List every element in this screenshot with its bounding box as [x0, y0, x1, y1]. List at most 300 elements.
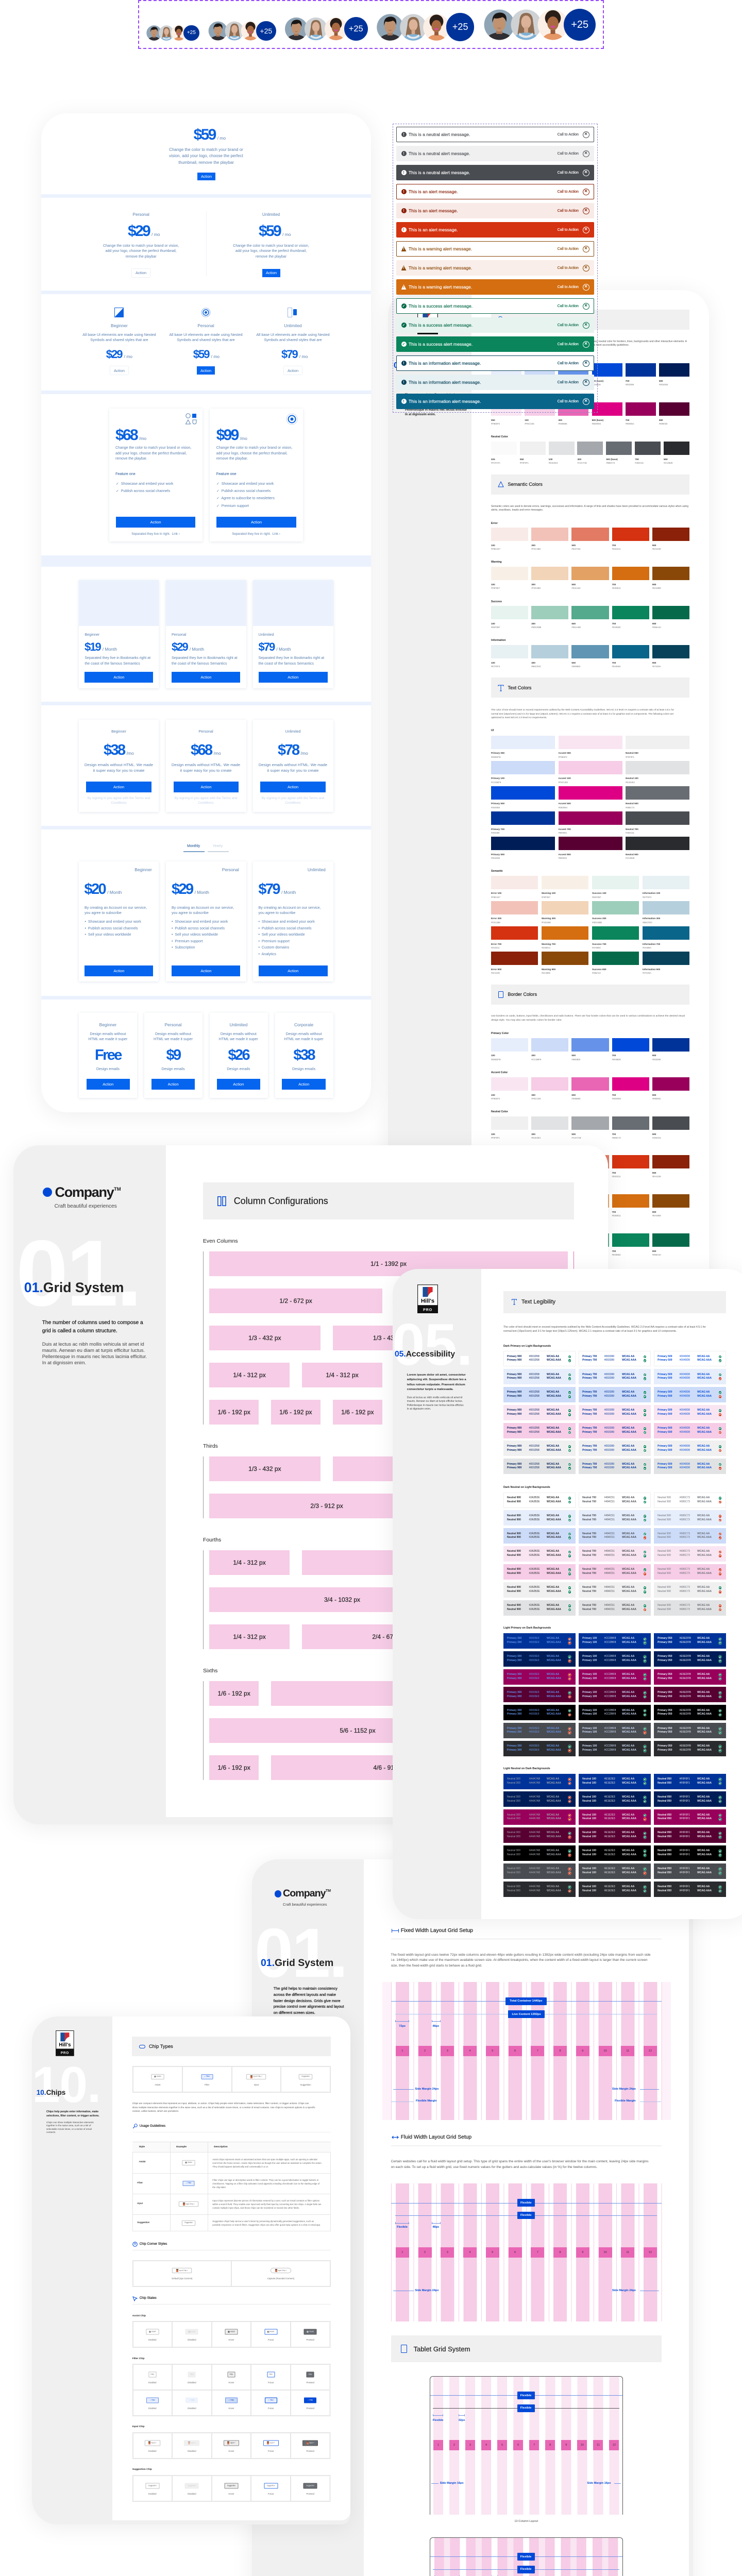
icon: chip pill [139, 2044, 145, 2048]
table: light neutral on dark: #F0F0F1 [680, 1795, 690, 1799]
swatches: warning border [491, 1194, 689, 1217]
text block: colours intro: Pellentesque in mauris nec lectus efficitur [405, 408, 467, 411]
swatches: neutral colour: #F0F0F1 [520, 462, 529, 464]
swatches: error: 100 [491, 544, 495, 546]
swatches: UI row 900: Accent 900 [559, 853, 571, 855]
table: dark primary on light: #001D58 [529, 1409, 539, 1412]
swatches: success border: 100 [491, 1250, 495, 1252]
table: light neutral on dark: Neutral 100 [582, 1795, 596, 1799]
table: dark neutral on light: Neutral 500 [657, 1586, 671, 1589]
list: personal: • Showcase and embed your work [172, 920, 228, 924]
alert: error outline: Call to Action [558, 190, 579, 194]
table: light neutral on dark: Neutral 300 [507, 1795, 520, 1799]
table: filter chip states: Hover [228, 2381, 234, 2384]
swatches: UI row 050: #E6EDFB [491, 756, 501, 758]
text block: column body: Duis at lectus ac nibh mollis vehicula sit amet id [42, 1341, 144, 1347]
button: beginner: Action [113, 675, 124, 680]
list: features right: ✓ Premium support [216, 504, 249, 508]
table: light neutral on dark: WCAG AA [622, 1814, 634, 1817]
column: fourths 3/4 [209, 1587, 475, 1612]
text block: assist: event from the home screen. Assist chips function as though the user asked an assistant to complete the action. [212, 2162, 322, 2164]
alert: warning outline: × [584, 245, 587, 251]
table: light primary on dark: #E6EDFB [680, 1655, 691, 1658]
swatches: UI row 900: Primary 900 [491, 853, 504, 855]
column numbers [433, 2440, 619, 2450]
table: light primary on dark: WCAG AA [622, 1691, 634, 1694]
price: feature plan left: $68 /mo [115, 427, 146, 444]
text block: terms personal [175, 796, 237, 805]
table: light neutral on dark: #A4A7AB [529, 1814, 540, 1817]
table: light neutral on dark: Neutral 300 [507, 1817, 520, 1820]
table: dark neutral on light: #686C73 [680, 1536, 690, 1539]
logo text: company: Company [283, 1888, 326, 1899]
text block: single plan description: vision, add your logo, choose the perfect [169, 154, 243, 158]
button: beginner: Action [113, 785, 124, 789]
table: dark neutral on light: #686C73 [680, 1518, 690, 1521]
table: light primary on dark: Primary 300 [507, 1641, 521, 1644]
swatches: success: #9DCEBB [531, 626, 541, 629]
table: light primary on dark: #CCDBF8 [604, 1713, 616, 1716]
text block: assist [212, 2158, 322, 2168]
table: light primary on dark: #CCDBF8 [604, 1695, 616, 1698]
text block: personal [154, 1031, 193, 1042]
chip: filter [182, 2181, 194, 2186]
table: light primary on dark [503, 1633, 726, 1756]
column numbers: 4 [469, 2251, 471, 2254]
text block: personal [169, 332, 243, 343]
table: dark primary on light: Primary 500 [657, 1431, 672, 1434]
heading: tablet grid system: Tablet Grid System [414, 2345, 470, 2352]
column numbers: 7 [533, 2444, 535, 2447]
label: semantic: Semantic [491, 870, 503, 873]
table: dark primary on light: #0049D8 [680, 1427, 690, 1430]
swatches: semantic 300: Information 300 [643, 917, 660, 920]
column: thirds filler [333, 1456, 446, 1481]
table: assist chip states: Assist [151, 2330, 156, 2332]
label: flexible content: Flexible [520, 2406, 531, 2410]
table: light neutral on dark: WCAG AA [547, 1867, 559, 1870]
table: light primary on dark: WCAG AA [547, 1691, 559, 1694]
swatches: primary colour: #6693E9 [558, 383, 567, 386]
text block: text colours intro [491, 708, 674, 719]
tagline: Craft beautiful experiences [283, 1902, 327, 1907]
swatches: primary border [491, 1038, 689, 1061]
swatches: UI row 500: #0049D8 [491, 806, 500, 809]
column numbers: 8 [559, 2251, 561, 2254]
alert: warning outline: This is a warning alert message. [409, 246, 472, 251]
label: column width: 72px [399, 2025, 406, 2028]
column: 1/6 third [333, 1400, 382, 1425]
avatar group: medium: +25 [349, 24, 363, 33]
heading: border colours: Border Colors [508, 992, 537, 997]
table: dark neutral on light: #494C51 [604, 1568, 615, 1571]
table: dark primary on light: WCAG AA [622, 1373, 634, 1376]
table: dark neutral on light: #686C73 [680, 1500, 690, 1503]
list: unlimited: • Showcase and embed your work [259, 920, 315, 924]
swatches: neutral border: #E1E2E3 [531, 1137, 541, 1139]
table: light primary on dark: #CCDBF8 [604, 1727, 616, 1730]
table: light primary on dark: WCAG AA [622, 1637, 634, 1640]
swatches: semantic 900: Success 900 [592, 968, 606, 971]
table: light primary on dark: #E6EDFB [680, 1641, 691, 1644]
table: light neutral on dark: WCAG AA [622, 1777, 634, 1781]
label: input chip: Input Chip [132, 2426, 144, 2428]
label: gutter: 32px [459, 2419, 465, 2422]
table: dark primary on light: #0049D8 [680, 1409, 690, 1412]
text block: grid intro: precise control over alignments and layout [274, 2004, 344, 2009]
swatches: error border: 100 [491, 1172, 495, 1174]
label: beginner: Beginner [111, 729, 126, 734]
table: light primary on dark: #E6EDFB [680, 1659, 691, 1662]
table: light primary on dark: Primary 300 [507, 1727, 521, 1730]
label: flexible content [517, 2566, 535, 2573]
table: light neutral on dark: Neutral 050 [657, 1831, 671, 1834]
alert: error outline: × [584, 189, 587, 194]
swatches: semantic 100: #E6F3EF [592, 896, 601, 899]
table: filter chip states: Enabled [148, 2381, 156, 2384]
table: dark primary on light: #0049D8 [680, 1359, 690, 1362]
table: light primary on dark: Primary 050 [657, 1677, 672, 1680]
table: light primary on dark: #6693E9 [529, 1655, 539, 1658]
table: suggestion chip states: Suggestion [188, 2484, 196, 2486]
table: dark neutral on light: Neutral 500 [657, 1500, 671, 1503]
swatches: warning: 300 [531, 583, 535, 585]
table: light neutral on dark: #A4A7AB [529, 1889, 540, 1892]
icon: Hill's logo: Hill's [59, 2043, 71, 2048]
table: chip types [132, 2066, 331, 2093]
column numbers: 11 [626, 2251, 629, 2254]
text block: column body [42, 1341, 147, 1366]
text block: corporate [284, 1031, 324, 1042]
table: dark primary on light: WCAG AA [547, 1391, 559, 1394]
text block: colours intro: The system palette. Personal design [405, 394, 459, 397]
swatches: accent colour: 500 (base) [592, 418, 603, 421]
table: dark neutral on light: #686C73 [680, 1604, 690, 1607]
swatches: warning border: 900 [652, 1211, 656, 1213]
swatches: UI row 100: #F6CCE6 [559, 781, 568, 784]
table: dark neutral on light: Neutral 700 [582, 1568, 596, 1571]
column: fourths 1/4 [209, 1550, 290, 1575]
text block: personal: it super easy for you to create [180, 768, 232, 773]
text block: terms beginner: Conditions [111, 801, 127, 805]
table: dark primary on light: #0049D8 [680, 1355, 690, 1358]
text block: terms beginner: By signing in you agree with the Terms and [88, 796, 150, 800]
text block: unlimited [259, 762, 327, 773]
table: dark neutral on light: Neutral 900 [507, 1532, 521, 1535]
alert: warning solid: This is a warning alert message. [409, 284, 472, 290]
swatches: information: 500 [571, 662, 576, 664]
alert: success tint: × [584, 321, 587, 328]
column: fourths 1/4 lower [209, 1624, 290, 1649]
table: dark primary on light: #003399 [604, 1413, 614, 1416]
text block: text colours intro: normal text (16px/1rem) and 3:1 for large text (18px/1.125rem). WCAG 2.1 requires a contrast ratio of at least 3:1 for graphics and UI components. The following colors are [491, 713, 674, 715]
swatches: UI row 500: Accent 500 [559, 802, 571, 805]
swatches: neutral border: #494C51 [652, 1137, 661, 1139]
text block: filter [212, 2178, 319, 2189]
table: dark neutral on light: Neutral 700 [582, 1518, 596, 1521]
table: light primary on dark: WCAG AAA [622, 1749, 636, 1752]
table: light primary on dark: Primary 050 [657, 1744, 672, 1748]
table: light neutral on dark: Neutral 100 [582, 1885, 596, 1888]
table: light neutral on dark: #A4A7AB [529, 1782, 540, 1785]
table: dark neutral on light: WCAG AAA [622, 1554, 636, 1557]
list: features right [216, 480, 275, 510]
price: personal: $29 / Month [172, 640, 204, 653]
text block: unlimited: Design emails without [221, 1031, 257, 1036]
table: input chip states: Input × [309, 2442, 314, 2444]
button: personal [174, 782, 239, 792]
swatches: UI row 050: #F0F0F1 [626, 756, 634, 758]
table: dark neutral on light: #494C51 [604, 1550, 615, 1553]
text block: beginner: you agree to subscribe [85, 911, 122, 915]
alert: neutral solid: This is a neutral alert message. [409, 170, 470, 175]
panel: grid layouts content [364, 1859, 689, 2576]
table: light neutral on dark: Neutral 300 [507, 1867, 520, 1870]
swatches: semantic 100: Error 100 [491, 892, 501, 894]
button: unlimited [260, 782, 326, 792]
text block: accessibility intro: adipiscing elit. Suspendisse dictum leo a [407, 1378, 466, 1381]
heading: text colours: Text Colors [508, 685, 531, 690]
table: dark neutral on light: #494C51 [604, 1514, 615, 1517]
icon: beginner square [114, 308, 124, 317]
table: light neutral on dark: WCAG AAA [697, 1800, 712, 1803]
swatches: semantic 700: Information 700 [643, 943, 660, 945]
label: flexible margin right: Flexible Margin [615, 2099, 636, 2103]
column numbers: 4 [469, 2049, 471, 2053]
table: light neutral on dark: #F0F0F1 [680, 1835, 690, 1838]
price: beginner: $29 / mo [106, 347, 132, 361]
card: feature plan right [210, 409, 303, 541]
swatches: error border: #F2C2B8 [531, 1175, 541, 1178]
table: input chip states: Input × [191, 2442, 196, 2444]
swatches: neutral colour: 050 [520, 457, 524, 461]
swatches: error: #E37A64 [571, 548, 581, 550]
swatches: success [491, 606, 689, 629]
table: light primary on dark: #CCDBF8 [604, 1749, 616, 1752]
button: feature plan right [216, 517, 296, 528]
table: light neutral on dark: #F0F0F1 [680, 1800, 690, 1803]
price: feature plan right: $99 /mo [216, 427, 247, 444]
section number: 01. [16, 1221, 140, 1326]
column: 1/4 second [302, 1363, 382, 1387]
table: light primary on dark: #E6EDFB [680, 1749, 691, 1752]
table: dark primary on light: WCAG AAA [547, 1359, 561, 1362]
heading bar: column configurations [203, 1182, 574, 1219]
table: light neutral on dark: #A4A7AB [529, 1853, 540, 1856]
table: dark primary on light: #001D58 [529, 1377, 539, 1380]
panel: chips page [32, 2016, 350, 2524]
table: dark neutral on light: Neutral 500 [657, 1532, 671, 1535]
icon: Hill's logo: PRO [423, 1307, 432, 1312]
table: light neutral on dark: #F0F0F1 [680, 1885, 690, 1888]
heading: semantic colours: Semantic Colors [508, 482, 543, 487]
column: sixths 5/6: 5/6 - 1152 px [340, 1727, 376, 1734]
table: dark primary on light: Primary 700 [582, 1413, 597, 1416]
swatches: UI row 900: #590033 [559, 857, 567, 859]
card: list plan unlimited [253, 861, 333, 981]
panel: accessibility page [393, 1269, 742, 1919]
alert: error outline [396, 184, 594, 199]
panel: avatar groups [138, 0, 604, 49]
label: flexible container: Flexible [520, 2201, 532, 2205]
button: unlimited [259, 672, 328, 683]
swatches: warning: 700 [612, 583, 616, 585]
text block: terms unlimited [262, 796, 324, 805]
column numbers: 1 [437, 2444, 439, 2447]
label: side margin right: Side Margin 24px [612, 2088, 636, 2091]
table: dark primary on light: #003399 [604, 1391, 614, 1394]
table: light neutral on dark: WCAG AA [622, 1795, 634, 1799]
table: light neutral on dark: #E1E2E3 [604, 1795, 615, 1799]
swatches: information: #E7F0F3 [491, 665, 500, 668]
alert: error outline: This is an alert message. [409, 189, 458, 194]
table: light neutral on dark: #F0F0F1 [680, 1867, 690, 1870]
swatches: primary border: #003399 [652, 1058, 661, 1061]
table: dark neutral on light: Neutral 900 [507, 1514, 521, 1517]
table: suggestion chip states: Focus [268, 2493, 274, 2495]
swatches: neutral border: 900 [652, 1132, 656, 1136]
table: dark neutral on light: WCAG AA [547, 1496, 559, 1499]
table: light neutral on dark: Neutral 100 [582, 1849, 596, 1852]
table: filter chip states: Hover [228, 2407, 234, 2410]
swatches: semantic 900: #8A2108 [491, 972, 500, 974]
table: light neutral on dark: #E1E2E3 [604, 1800, 615, 1803]
swatches: UI row 100: #E1E2E3 [626, 781, 635, 784]
text block: chips body: contacts. [46, 2131, 56, 2133]
column: thirds 2/3 [209, 1494, 444, 1518]
column: thirds 2/3: 2/3 - 912 px [310, 1502, 343, 1510]
swatches: error border: 300 [531, 1172, 535, 1174]
swatches: warning: #F8F0E7 [491, 587, 500, 589]
text block: fluid width description: Certain websites call for a fluid width layout grid setup. This type of grid spans the entire width of the user's browser window for the main content, leaving 24px side margins [391, 2160, 649, 2163]
table: dark neutral on light: WCAG AAA [622, 1518, 636, 1521]
table: input chip states: Input × [269, 2442, 275, 2444]
swatches: semantic 700: #0A855C [592, 946, 601, 949]
alert: information tint: Call to Action [558, 380, 579, 384]
table: light neutral on dark: WCAG AAA [547, 1853, 561, 1856]
column numbers: 9 [565, 2444, 567, 2447]
swatches: UI row 500 [491, 786, 689, 809]
column numbers [396, 2046, 657, 2056]
table: light primary on dark: WCAG AA [547, 1637, 559, 1640]
column numbers: 2 [424, 2251, 426, 2254]
table: light neutral on dark: #E1E2E3 [604, 1814, 615, 1817]
button: beginner [85, 965, 153, 976]
table: assist chip states: Disabled [188, 2338, 196, 2341]
table: light primary on dark: WCAG AA [622, 1727, 634, 1730]
alert: success outline: × [584, 303, 587, 308]
swatches: semantic 900: Information 900 [643, 968, 660, 971]
table: light neutral on dark: WCAG AAA [697, 1782, 712, 1785]
table: dark neutral on light: WCAG AAA [547, 1500, 561, 1503]
label: error: Error [491, 522, 498, 525]
alert: neutral tint [396, 146, 594, 161]
text block: personal [172, 905, 234, 916]
avatar group: medium [284, 16, 368, 41]
table: filter chip states: Enabled [148, 2407, 156, 2410]
swatches: UI row 500: Neutral 500 [626, 802, 638, 805]
text block: personal [172, 655, 238, 667]
table: dark primary on light: #0049D8 [680, 1373, 690, 1376]
tagline: Craft beautiful experiences [55, 1204, 117, 1209]
text block: filter: Filter chips use tags or descriptive words to filter content. They can be a good alternative to toggle buttons or [212, 2179, 319, 2181]
table: light neutral on dark: Neutral 100 [582, 1777, 596, 1781]
table: dark primary on light: #001D58 [529, 1427, 539, 1430]
swatches: accent colour: 700 [626, 418, 629, 421]
table: chip corner styles [132, 2260, 331, 2287]
table: light primary on dark: WCAG AA [547, 1709, 559, 1712]
swatches: UI row 100: Accent 100 [559, 777, 571, 779]
table: dark primary on light: Primary 700 [582, 1391, 597, 1394]
price: single plan: $59 / mo [194, 126, 226, 143]
table: light neutral on dark: #E1E2E3 [604, 1835, 615, 1838]
swatches: success: #E6F3EF [491, 626, 500, 629]
table: dark neutral on light: Neutral 900 [507, 1568, 521, 1571]
table: filter chip states: Filter [269, 2373, 273, 2375]
alert: information outline: Call to Action [558, 361, 579, 365]
card: compact plan beginner [79, 1013, 137, 1098]
text block: filter: the chip label. [212, 2186, 226, 2189]
text block: terms unlimited: By signing in you agree with the Terms and [262, 796, 324, 800]
list: unlimited [259, 919, 315, 957]
table: dark neutral on light: #494C51 [604, 1532, 615, 1535]
table: light primary on dark: Primary 100 [582, 1713, 597, 1716]
table: light neutral on dark: Neutral 300 [507, 1777, 520, 1781]
table: light neutral on dark: #A4A7AB [529, 1795, 540, 1799]
table: dark primary on light: Primary 900 [507, 1391, 521, 1394]
swatches: UI row 100: Primary 100 [491, 777, 504, 779]
text block: beginner: it super easy for you to create [93, 768, 145, 773]
table: light neutral on dark: Neutral 100 [582, 1814, 596, 1817]
alert: information outline: × [584, 360, 587, 366]
table: light neutral on dark: Neutral 050 [657, 1871, 671, 1874]
text block: chips body [46, 2121, 94, 2134]
table: dark neutral on light: WCAG AA [622, 1532, 634, 1535]
table: light neutral on dark: Neutral 100 [582, 1817, 596, 1820]
swatches: neutral colour: #E1E2E3 [549, 462, 558, 464]
table: dark primary on light: WCAG AAA [547, 1395, 561, 1398]
swatches: success border: #E6F3EF [491, 1253, 500, 1256]
table: light primary on dark: WCAG AAA [547, 1713, 561, 1716]
caption: 12 column layout: 12-Column Layout [514, 2520, 538, 2523]
swatches: success: 100 [491, 622, 495, 624]
label: side margin right: Side Margin 16px [587, 2482, 611, 2485]
list: unlimited: • Publish across social channels [259, 926, 312, 930]
swatches: primary border: 300 [531, 1054, 535, 1057]
table: light primary on dark: #E6EDFB [680, 1691, 691, 1694]
swatches: primary border: #0049D8 [612, 1058, 621, 1061]
text block: column intro: grid is called a column structure. [42, 1328, 117, 1334]
table: dark neutral on light: WCAG AAA [697, 1554, 712, 1557]
icon: corner styles [132, 2242, 138, 2247]
table: input chip states: Input × [230, 2442, 235, 2444]
text block: unlimited description: add your logo, choose the perfect thumbnail, [235, 249, 307, 253]
table: dark primary on light: WCAG AAA [622, 1413, 636, 1416]
swatches: UI row 700: Primary 700 [491, 827, 504, 831]
button: personal action [132, 269, 150, 277]
swatches: information: 700 [612, 662, 616, 664]
table: light primary on dark: WCAG AAA [697, 1731, 712, 1734]
alert: information solid: This is an information alert message. [409, 399, 481, 404]
table: dark primary on light: Primary 500 [657, 1445, 672, 1448]
alert: success solid: Call to Action [558, 342, 579, 346]
table: dark neutral on light: WCAG AAA [547, 1536, 561, 1539]
swatches: information: 900 [652, 662, 656, 664]
icon: company dot [43, 1188, 52, 1197]
table: dark neutral on light: Neutral 900 [507, 1554, 521, 1557]
swatches: semantic 900: Warning 900 [542, 968, 555, 971]
table: light primary on dark: #6693E9 [529, 1659, 539, 1662]
